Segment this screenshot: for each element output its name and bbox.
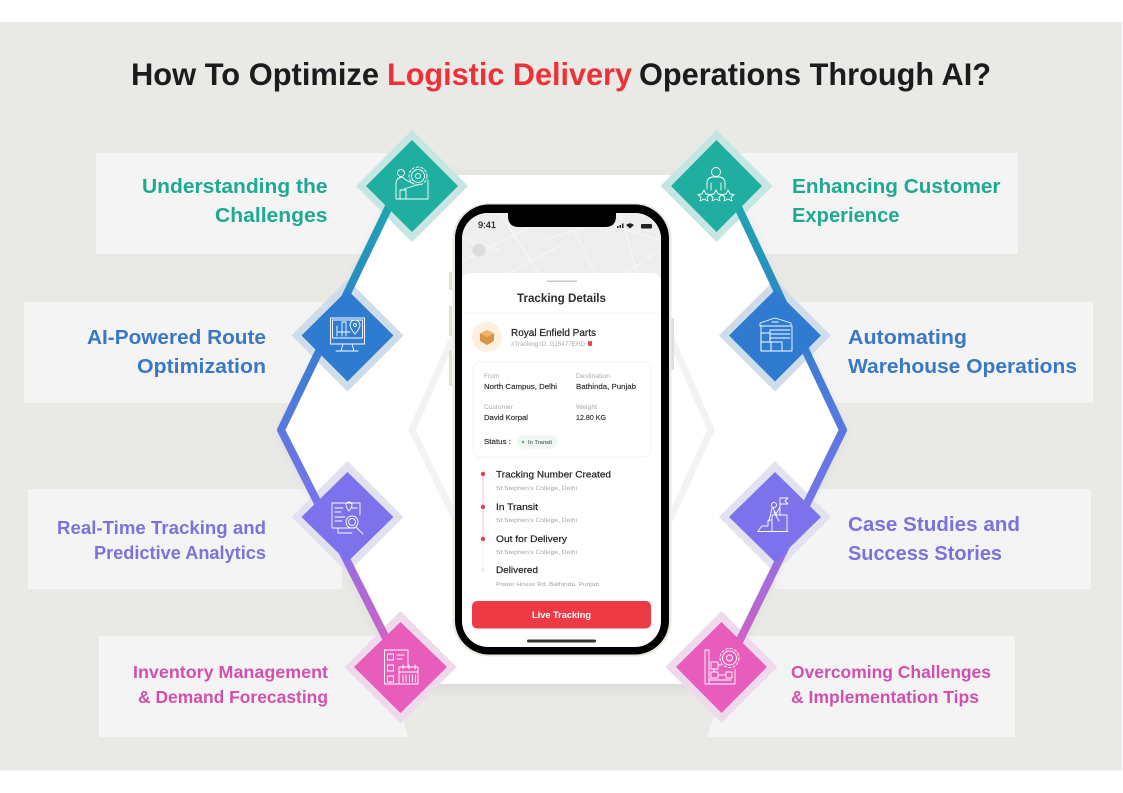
- label: AI-powered route optimization: [87, 327, 266, 378]
- label: inventory management and demand forecasting: & Demand Forecasting: [138, 687, 328, 707]
- phone body: [452, 203, 672, 656]
- shipment info card: [473, 362, 651, 457]
- connector line: right: [730, 190, 843, 650]
- tracking timeline: St Stephen's College, Delhi: [496, 486, 577, 492]
- title: How To Optimize: [131, 56, 379, 92]
- tracking timeline: St Stephen's College, Delhi: [496, 550, 577, 556]
- label: case studies and success stories: Case Studies and: [848, 514, 1020, 536]
- panel: inventory management background: [99, 636, 408, 737]
- label: inventory management and demand forecasting: Inventory Management: [133, 662, 328, 682]
- label: real-time tracking and predictive analytics: Real-Time Tracking and: [57, 517, 266, 538]
- label: overcoming challenges and implementation tips: Overcoming Challenges: [791, 662, 991, 682]
- title: Logistic Delivery: [387, 56, 632, 92]
- label: automating warehouse operations: Automating: [848, 327, 967, 349]
- tracking timeline: St Stephen's College, Delhi: [496, 518, 577, 524]
- title: Operations Through AI?: [639, 56, 991, 92]
- label: understanding the challenges: [142, 176, 328, 227]
- tracking timeline: Out for Delivery: [496, 534, 567, 545]
- diamond icon: customer stars: [671, 140, 762, 232]
- tracking sheet: Tracking Details: [517, 293, 606, 305]
- diamond icon: flag on steps: [729, 472, 821, 562]
- label: AI-powered route optimization: AI-Powered Route: [87, 327, 266, 349]
- label: real-time tracking and predictive analytics: Predictive Analytics: [94, 542, 266, 563]
- diamond icon: climbing with gear: [366, 140, 458, 232]
- label: automating warehouse operations: [848, 327, 1077, 378]
- label: overcoming challenges and implementation tips: & Implementation Tips: [791, 687, 979, 707]
- status icons: [617, 223, 652, 228]
- panel: case studies background: [775, 489, 1091, 589]
- live tracking button: Live Tracking: [532, 610, 591, 621]
- panel: automating warehouse operations background: [780, 302, 1093, 403]
- label: enhancing customer experience: Enhancing Customer: [792, 176, 1001, 198]
- shipment info card: Destination: [576, 374, 610, 380]
- shipment info card: In Transit: [528, 440, 553, 446]
- label: understanding the challenges: Challenges: [215, 205, 328, 227]
- tracking timeline: Power House Rd, Bathinda, Punjab: [496, 582, 599, 588]
- shipment info card: Customer: [484, 405, 513, 411]
- label: enhancing customer experience: [792, 176, 1001, 227]
- panel: real-time tracking background: [28, 489, 342, 589]
- label: understanding the challenges: Understanding the: [142, 176, 328, 198]
- tracking timeline: Delivered: [496, 565, 538, 576]
- faint inner hexagon outline left: [412, 322, 462, 532]
- shipment info card: Bathinda, Punjab: [576, 382, 636, 391]
- tracking timeline: Tracking Number Created: [496, 470, 611, 480]
- map back button: [472, 244, 486, 256]
- notch: [508, 212, 616, 227]
- panel: AI-powered route optimization background: [24, 302, 344, 403]
- title: [131, 56, 991, 92]
- status time: 9:41: [478, 220, 496, 230]
- live tracking button: [472, 601, 651, 628]
- label: overcoming challenges and implementation tips: [791, 662, 991, 707]
- tracking timeline: In Transit: [496, 502, 538, 513]
- tracking timeline: [481, 470, 611, 588]
- shipment info card: From: [484, 374, 499, 380]
- phone mockup: [449, 203, 674, 656]
- label: AI-powered route optimization: Optimization: [137, 356, 266, 378]
- diamond icon: gear with blueprint: [676, 622, 767, 713]
- phone side buttons: [449, 272, 674, 386]
- diamond icon: monitor with route: [302, 290, 394, 382]
- home indicator: [527, 640, 596, 642]
- shipment info card: North Campus, Delhi: [484, 382, 557, 391]
- shipment info card: David Korpal: [484, 413, 528, 422]
- shipment info card: Status :: [484, 437, 511, 446]
- diamond icon: warehouse: [729, 290, 821, 382]
- diamond halos: [292, 130, 831, 723]
- map background: [462, 213, 661, 283]
- label: real-time tracking and predictive analytics: [57, 517, 266, 563]
- label: case studies and success stories: [848, 514, 1020, 565]
- parcel item: #Tracking ID: G15477ERD: [511, 342, 586, 348]
- parcel item: [472, 322, 596, 352]
- shipment info card: 12.80 KG: [576, 413, 606, 422]
- connector line: left: [281, 190, 397, 650]
- panel: overcoming challenges background: [707, 636, 1015, 737]
- panel: understanding the challenges background: [96, 153, 416, 254]
- label: case studies and success stories: Success Stories: [848, 543, 1002, 565]
- parcel item: Royal Enfield Parts: [511, 328, 596, 339]
- tracking sheet: [462, 273, 661, 620]
- label: inventory management and demand forecasting: [133, 662, 328, 707]
- shipment info card: Weight: [576, 405, 597, 411]
- label: automating warehouse operations: Warehouse Operations: [848, 356, 1077, 378]
- diamond icon: inventory calendar: [354, 622, 447, 713]
- panel: enhancing customer experience background: [710, 153, 1018, 254]
- central white hexagon: [281, 175, 843, 684]
- diamond icon: real-time analytics: [302, 472, 394, 562]
- faint inner hexagon outline right: [664, 322, 711, 532]
- label: enhancing customer experience: Experience: [792, 205, 900, 227]
